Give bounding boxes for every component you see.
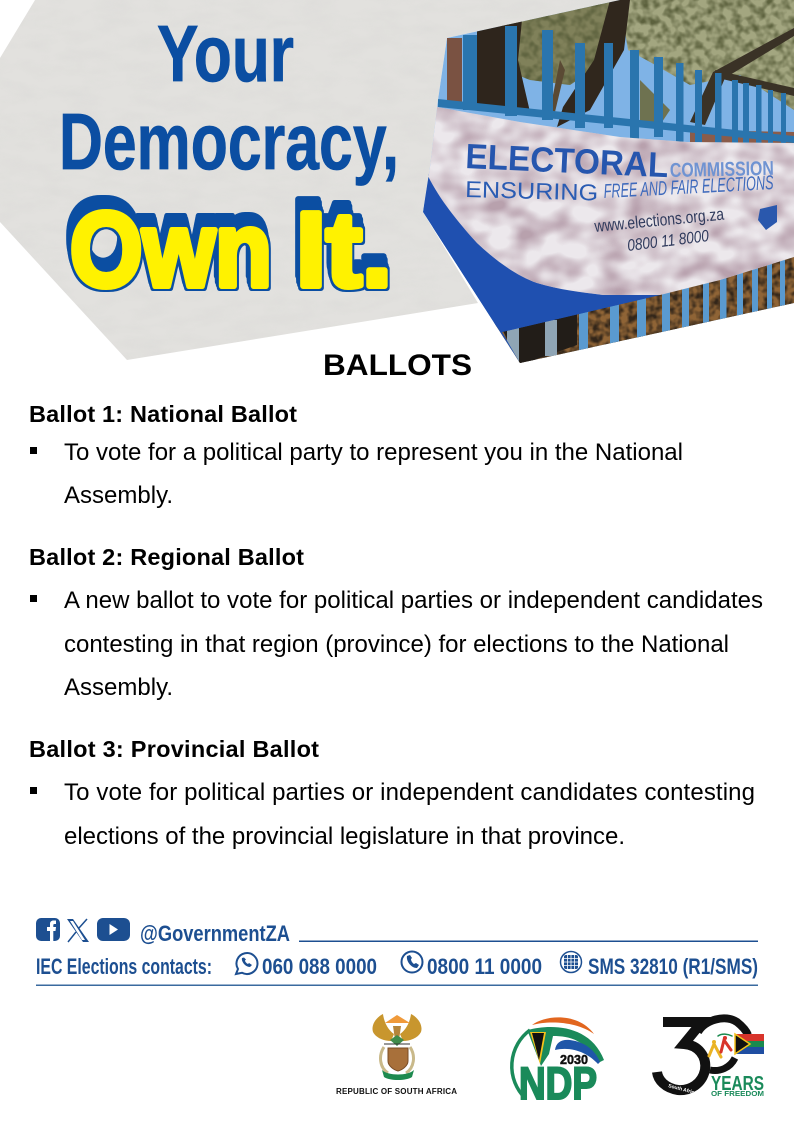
handle: @GovernmentZA bbox=[140, 921, 290, 946]
footer: contacts row: IEC Elections contacts: bbox=[36, 954, 212, 979]
bullet text: Ballot 2 description: contesting in that region (province) for elections to the National bbox=[64, 631, 729, 658]
banner white cloth bbox=[428, 107, 794, 295]
brick wall behind fence bbox=[690, 131, 794, 143]
shield bbox=[388, 1048, 408, 1071]
sky bbox=[420, 0, 794, 370]
logo: NDP 2030: NDP bbox=[519, 1058, 597, 1109]
rings bbox=[381, 1047, 413, 1073]
logo: NDP 2030: 2030 bbox=[560, 1052, 588, 1067]
section: Ballot 2 bbox=[29, 544, 763, 701]
title: Your Democracy: Democracy, bbox=[59, 97, 399, 186]
footer: contacts row: 0800 11 0000 bbox=[427, 954, 542, 979]
wings bbox=[372, 1014, 394, 1041]
bullet text: Ballot 1 description: Assembly. bbox=[64, 482, 173, 509]
section: Ballot 3 bbox=[29, 736, 755, 850]
ground below the banner bbox=[494, 257, 794, 363]
bullet text: Ballot 2 description bbox=[30, 587, 763, 701]
banner text bbox=[465, 137, 777, 255]
people figures bbox=[709, 1034, 732, 1057]
heading: BALLOTS: BALLOTS bbox=[323, 349, 472, 382]
logo: coat of arms: REPUBLIC OF SOUTH AFRICA bbox=[336, 1087, 457, 1096]
title: Own It: It. bbox=[296, 191, 392, 309]
banner text: 0800 11 8000 bbox=[626, 227, 711, 255]
footer: social media row bbox=[36, 918, 758, 946]
ribbon bbox=[382, 1070, 414, 1080]
bullet text: Ballot 3 description bbox=[30, 779, 755, 850]
icon: YouTube bbox=[97, 918, 130, 941]
banner text: ELECTORAL bbox=[465, 137, 669, 185]
banner blue swoosh bbox=[423, 172, 660, 363]
logo: 30 years of freedom: South Africa 1994 bbox=[667, 1083, 710, 1100]
heading: Ballot 3: Ballot 3: Provincial Ballot bbox=[29, 736, 319, 762]
title: Your Democracy: Your bbox=[157, 9, 294, 98]
logo: 30 years of freedom bbox=[657, 1018, 764, 1100]
icon: SMS keypad bbox=[560, 952, 582, 972]
icon: phone bbox=[402, 952, 422, 972]
title: Own It: Own bbox=[70, 191, 272, 309]
logo: coat of arms bbox=[336, 1014, 457, 1096]
bullet text: Ballot 3 description: To vote for political parties or independent candidates contesting bbox=[64, 779, 755, 806]
tree foliage bbox=[620, 0, 794, 110]
footer: contacts row bbox=[36, 952, 758, 986]
banner text: ENSURING bbox=[465, 176, 599, 205]
trunks and branches bbox=[447, 38, 462, 102]
bullet text: Ballot 1 description bbox=[30, 439, 683, 509]
bullet text: Ballot 2 description: Assembly. bbox=[64, 674, 173, 701]
logo: NDP 2030 bbox=[512, 1017, 604, 1109]
flag bbox=[735, 1034, 764, 1054]
footer: contacts row: 060 088 0000 bbox=[262, 954, 377, 979]
heading: Ballot 2: Ballot 2: Regional Ballot bbox=[29, 544, 304, 570]
heading: Ballot 1: Ballot 1: National Ballot bbox=[29, 401, 297, 427]
banner text: www.elections.org.za bbox=[593, 205, 725, 236]
bullet text: Ballot 2 description: A new ballot to vote for political parties or independent candidates bbox=[64, 587, 763, 614]
section: Ballot 1 bbox=[29, 401, 683, 509]
bullet text: Ballot 3 description: elections of the provincial legislature in that province. bbox=[64, 823, 625, 850]
logo: 30 years of freedom: YEARS bbox=[711, 1073, 764, 1095]
fence bars top bbox=[438, 26, 794, 145]
photo: electoral commission banner on fence bbox=[420, 0, 794, 370]
icon: WhatsApp bbox=[236, 953, 257, 974]
panel: concrete header background bbox=[0, 0, 620, 360]
bullet text: Ballot 1 description: To vote for a political party to represent you in the National bbox=[64, 439, 683, 466]
title: Your Democracy bbox=[59, 9, 399, 186]
icon: facebook bbox=[36, 918, 60, 941]
sun bbox=[385, 1015, 410, 1023]
logo: 30 years of freedom: OF FREEDOM bbox=[711, 1091, 764, 1098]
icon: X bbox=[67, 919, 89, 942]
